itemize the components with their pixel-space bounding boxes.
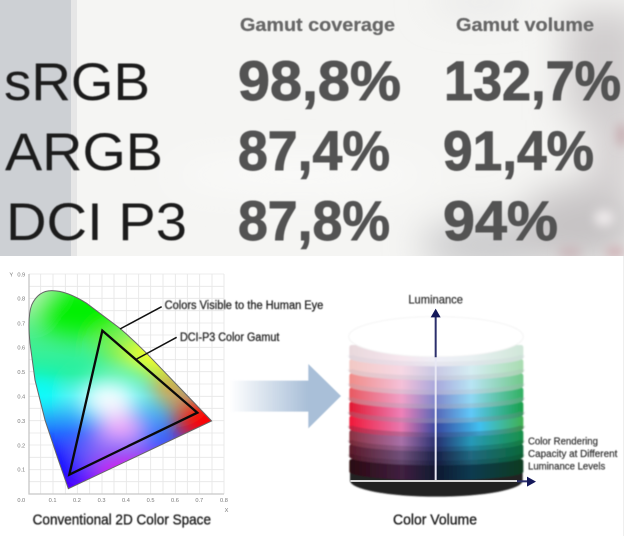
axis labels: Y — [9, 273, 13, 279]
gamut values: 91,4% — [443, 119, 594, 182]
label: luminance: Luminance — [408, 293, 463, 306]
axis labels: 0.8 — [17, 297, 25, 303]
label: DCI-P3: DCI-P3 Color Gamut — [180, 330, 280, 344]
label: rendering capacity: Luminance Levels — [528, 462, 605, 473]
label: rendering capacity: Capacity at Different — [528, 449, 618, 460]
row labels: sRGB — [4, 53, 150, 112]
axis labels: X — [225, 508, 229, 514]
axis labels: 0.4 — [17, 394, 25, 400]
axis labels: 0.1 — [49, 498, 57, 504]
gamut values: 98,8% — [238, 49, 401, 112]
row labels — [4, 53, 187, 252]
axis labels: 0.6 — [171, 498, 179, 504]
gamut values — [238, 49, 621, 252]
caption: color volume: Color Volume — [393, 512, 477, 528]
axis labels: 0.7 — [17, 321, 25, 327]
axis labels: 0.9 — [17, 273, 25, 279]
arrow: 2D to volume — [230, 364, 341, 428]
luminance axis — [431, 309, 441, 481]
gamut values: 87,4% — [238, 119, 390, 182]
panel: gamut comparison table — [0, 0, 624, 271]
column headings: Gamut coverage — [240, 15, 395, 35]
leader: DCI-P3 — [137, 337, 177, 359]
label: visible colors: Colors Visible to the Human Eye — [165, 298, 324, 312]
row labels: ARGB — [5, 123, 163, 182]
axis labels: 0.4 — [122, 498, 130, 504]
leader: visible colors — [120, 307, 162, 329]
stacked color discs — [349, 317, 523, 497]
axis labels: 0.2 — [73, 498, 81, 504]
chart grid — [29, 274, 224, 494]
label: rendering capacity — [528, 436, 618, 473]
axis labels: 0.6 — [17, 346, 25, 352]
axis labels: 0.1 — [17, 468, 25, 474]
gamut values: 87,8% — [238, 189, 390, 252]
caption: 2D color space: Conventional 2D Color Space — [33, 512, 211, 528]
panel: conventional 2D color space — [3, 273, 324, 528]
label: rendering capacity: Color Rendering — [528, 436, 598, 447]
axis labels: 0.5 — [17, 370, 25, 376]
DCI-P3 triangle — [69, 331, 197, 475]
axis labels: 0.8 — [220, 498, 228, 504]
blurred photo background — [0, 0, 624, 271]
axis labels — [9, 273, 229, 514]
axis labels: 0.2 — [17, 443, 25, 449]
row labels: DCI P3 — [6, 193, 187, 252]
panel: color volume cylinder — [349, 293, 618, 528]
horizontal axis — [350, 477, 536, 487]
axis labels: 0.0 — [17, 498, 25, 504]
axis labels: 0.3 — [17, 419, 25, 425]
column headings: Gamut volume — [456, 15, 594, 35]
axis labels: 0.7 — [195, 498, 203, 504]
axis labels: 0.5 — [147, 498, 155, 504]
chromaticity horseshoe — [28, 290, 212, 490]
axis labels: 0.3 — [98, 498, 106, 504]
column headings — [240, 15, 594, 35]
gamut values: 94% — [443, 189, 558, 252]
